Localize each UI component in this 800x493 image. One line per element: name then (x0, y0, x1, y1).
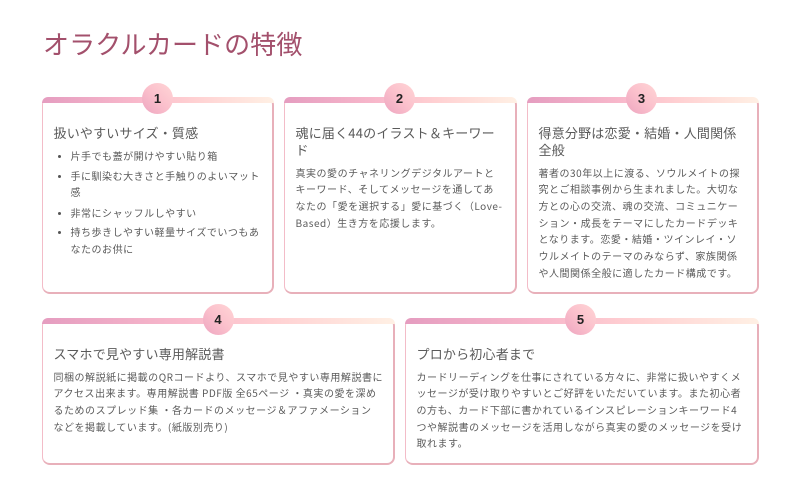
bullet list 1: 感 (70, 184, 81, 199)
body text 3: 究とご相談事例から生まれました。大切な (538, 181, 738, 196)
heading 2: ド (296, 140, 309, 159)
bullet list 1: 片手でも蓋が開けやすい貼り箱 (70, 148, 218, 162)
number badge 2: 2 (396, 91, 403, 106)
body text 3 (538, 164, 740, 280)
bullet list 1: 非常にシャッフルしやすい (70, 204, 197, 220)
body text 3: となります。恋愛・結婚・ツインレイ・ソ (538, 231, 737, 246)
number badge 5: 5 (577, 312, 584, 327)
number badge 1 (142, 83, 173, 114)
number badge 3 (626, 83, 657, 114)
number badge 3: 3 (638, 91, 645, 106)
top gradient bar 1 (42, 97, 274, 103)
heading 3: 得意分野は恋愛・結婚・人間関係 (538, 123, 737, 142)
body text 2 (296, 164, 503, 230)
heading 1: 扱いやすいサイズ・質感 (54, 123, 198, 142)
bullet list 1 (58, 148, 260, 256)
heading 5: プロから初心者まで (416, 344, 535, 363)
body text 2: 真実の愛のチャネリングデジタルアートと (296, 164, 494, 180)
heading 2 (296, 123, 495, 159)
body text 4: 同梱の解説紙に掲載のQRコードより、スマホで見やすい専用解説書に (54, 368, 383, 384)
number badge 4: 4 (214, 312, 222, 327)
body text 3: や人間関係全般に適したカード構成です。 (538, 265, 737, 280)
body text 3: ション・成長をテーマにしたカードデッキ (538, 215, 738, 230)
body text 5 (416, 368, 742, 450)
heading 3 (538, 123, 737, 159)
number badge 5 (565, 304, 596, 335)
panel: card 1 (42, 97, 274, 294)
top gradient bar 4 (42, 318, 395, 324)
panel: card 4 (42, 318, 395, 465)
heading 4: スマホで見やすい専用解説書 (54, 344, 225, 363)
panel: card 3 (527, 97, 759, 294)
panel: card 5 (405, 318, 759, 465)
top gradient bar 3 (526, 97, 759, 103)
body text 2: キーワード、そしてメッセージを通してあ (296, 181, 494, 196)
number badge 4 (202, 304, 234, 335)
heading 3: 全般 (538, 140, 565, 159)
body text 4: などを掲載しています。(紙版別売り) (54, 419, 228, 434)
body text 5: の方も、カード下部に書かれているインスピレーションキーワード4 (416, 402, 737, 417)
body text 5: カードリーディングを仕事にされている方々に、非常に扱いやすくメ (416, 368, 741, 384)
top gradient bar 2 (284, 97, 517, 103)
body text 4 (54, 368, 383, 434)
number badge 1: 1 (154, 91, 161, 106)
body text 3: 方との心の交流、魂の交流、コミュニケー (538, 198, 738, 213)
body text 5: つや解説書のメッセージを活用しながら真実の愛のメッセージを受け (416, 419, 742, 434)
body text 4: アクセス出来ます。専用解説書 PDF版 全65ページ ・真実の愛を深め (54, 385, 377, 400)
body text 2: Based）生き方を応援します。 (296, 215, 441, 230)
body text 3: ウルメイトのテーマのみならず、家族関係 (538, 248, 737, 263)
bullet list 1: 持ち歩きしやすい軽量サイズでいつもあ (70, 224, 259, 238)
bullet list 1: なたのお供に (70, 241, 134, 256)
body text 3: 著者の30年以上に渡る、ソウルメイトの探 (538, 164, 740, 180)
panel: card 2 (284, 97, 517, 294)
number badge 2 (384, 83, 415, 114)
body text 2: なたの「愛を選択する」愛に基づく（Love- (296, 198, 503, 213)
body text 4: るためのスプレッド集 ・各カードのメッセージ＆アファメーション (54, 402, 371, 417)
top gradient bar 5 (404, 318, 759, 324)
bullet list 1: 手に馴染む大きさと手触りのよいマット (70, 168, 260, 182)
heading 2: 魂に届く44のイラスト＆キーワー (296, 123, 495, 142)
body text 5: ッセージが受け取りやすいとご好評をいただいています。また初心者 (416, 385, 741, 400)
title: オラクルカードの特徴 (43, 25, 302, 62)
body text 5: 取れます。 (416, 435, 468, 450)
